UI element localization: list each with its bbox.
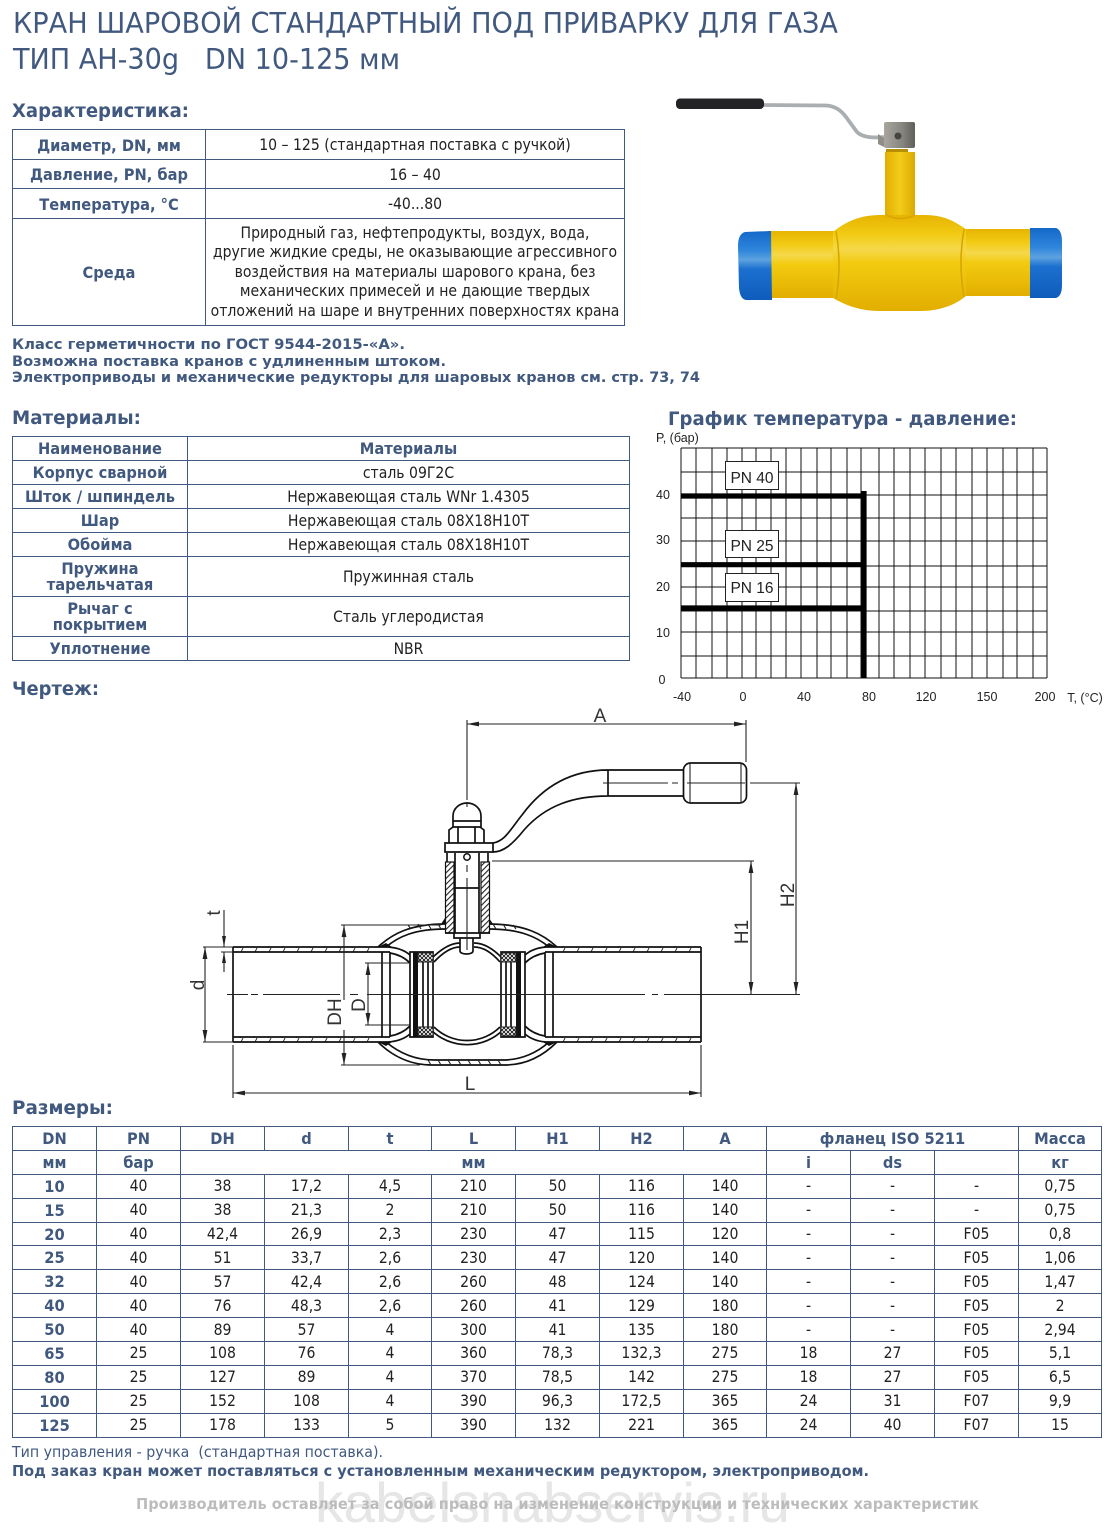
table: dimensions: 48,3 bbox=[291, 1297, 322, 1315]
table: dimensions: 40 bbox=[130, 1249, 147, 1267]
label: PN 25 bbox=[726, 530, 778, 558]
table: dimensions: 42,4 bbox=[291, 1273, 322, 1291]
table: dimensions: 4 bbox=[386, 1368, 394, 1386]
table: dimensions: 370 bbox=[460, 1368, 487, 1386]
table: dimensions: 27 bbox=[884, 1344, 901, 1362]
table: characteristics: Диаметр, DN, мм bbox=[37, 136, 181, 154]
table: materials: Обойма bbox=[68, 535, 132, 554]
table: dimensions: - bbox=[806, 1297, 811, 1315]
table: dimensions: - bbox=[806, 1225, 811, 1243]
table: dimensions: 0,75 bbox=[1044, 1201, 1076, 1219]
table: characteristics: механических примесей и не дающие твердых bbox=[240, 282, 590, 300]
table: dimensions: 41 bbox=[549, 1321, 566, 1339]
table: dimensions: 40 bbox=[44, 1296, 65, 1315]
notes bbox=[12, 337, 700, 386]
table: dimensions: 390 bbox=[460, 1392, 487, 1410]
dimension: t bbox=[204, 910, 233, 972]
table: dimensions: 17,2 bbox=[291, 1177, 322, 1195]
icon: left blue cap bbox=[738, 231, 772, 300]
label: PN 40 bbox=[726, 462, 778, 490]
table: dimensions: 2,3 bbox=[379, 1225, 401, 1243]
table: dimensions: 89 bbox=[298, 1368, 315, 1386]
x axis labels: -40 bbox=[673, 690, 691, 704]
table: dimensions: 133 bbox=[293, 1416, 320, 1434]
table: dimensions: 365 bbox=[712, 1392, 738, 1410]
table: dimensions: A bbox=[719, 1129, 731, 1148]
table: dimensions: 78,5 bbox=[542, 1368, 573, 1386]
table: materials: Наименование bbox=[38, 439, 162, 458]
table: dimensions: i bbox=[806, 1153, 811, 1172]
table: dimensions: мм bbox=[43, 1153, 66, 1172]
table: dimensions: - bbox=[890, 1249, 895, 1267]
table: dimensions: 132 bbox=[544, 1416, 571, 1434]
table: characteristics: 16 – 40 bbox=[389, 166, 441, 184]
label: PN 25: PN 25 bbox=[730, 538, 774, 555]
table: dimensions: - bbox=[806, 1201, 811, 1219]
table: dimensions: 40 bbox=[130, 1297, 147, 1315]
notes: Возможна поставка кранов с удлиненным штоком. bbox=[12, 354, 446, 370]
table: dimensions: 47 bbox=[549, 1225, 566, 1243]
table: dimensions: - bbox=[974, 1177, 979, 1195]
table: dimensions: 115 bbox=[628, 1225, 655, 1243]
heading: dimensions: Размеры: bbox=[12, 1097, 113, 1119]
table: dimensions: 57 bbox=[214, 1273, 231, 1291]
table: dimensions: 21,3 bbox=[291, 1201, 322, 1219]
table: dimensions: - bbox=[806, 1273, 811, 1291]
table: dimensions: 135 bbox=[628, 1321, 655, 1339]
table: dimensions: 178 bbox=[209, 1416, 236, 1434]
table: dimensions: ds bbox=[883, 1153, 902, 1172]
dimension: H1: H1 bbox=[732, 920, 753, 944]
table: dimensions: 230 bbox=[460, 1225, 487, 1243]
chart: temperature-pressure bbox=[656, 431, 1103, 705]
table: dimensions: 5,1 bbox=[1049, 1344, 1071, 1362]
table: dimensions: 24 bbox=[800, 1392, 817, 1410]
icon: yellow stem bbox=[885, 152, 915, 218]
table: dimensions: F05 bbox=[964, 1368, 989, 1386]
table: dimensions: F05 bbox=[964, 1249, 989, 1267]
table: dimensions: 9,9 bbox=[1049, 1392, 1071, 1410]
footer note: control type: Тип управления - ручка (стандартная поставка). bbox=[11, 1443, 383, 1461]
table: dimensions: 2,6 bbox=[379, 1249, 401, 1267]
table: materials: тарельчатая bbox=[47, 575, 153, 594]
table: dimensions: 127 bbox=[209, 1368, 236, 1386]
table: dimensions: 275 bbox=[712, 1344, 738, 1362]
notes: Электроприводы и механические редукторы для шаровых кранов см. стр. 73, 74 bbox=[12, 370, 700, 386]
y axis labels: 40 bbox=[656, 488, 670, 502]
table: dimensions: 100 bbox=[39, 1392, 70, 1411]
table: dimensions: 26,9 bbox=[291, 1225, 322, 1243]
table: dimensions: 142 bbox=[628, 1368, 655, 1386]
heading: materials: Материалы: bbox=[12, 407, 141, 429]
drawing: ball bbox=[431, 943, 503, 1045]
table: dimensions: кг bbox=[1051, 1153, 1069, 1172]
table: dimensions: 124 bbox=[628, 1273, 655, 1291]
title bbox=[12, 6, 838, 76]
table: materials: Корпус сварной bbox=[33, 463, 167, 482]
table: dimensions: 25 bbox=[130, 1392, 147, 1410]
table: dimensions: 260 bbox=[460, 1297, 487, 1315]
table: dimensions: 15 bbox=[44, 1201, 65, 1220]
technical drawing bbox=[188, 706, 800, 1098]
table: dimensions: PN bbox=[127, 1129, 150, 1148]
y axis labels: P, (бар) bbox=[656, 431, 699, 445]
table: dimensions: 260 bbox=[460, 1273, 487, 1291]
table: materials: сталь 09Г2С bbox=[363, 464, 454, 482]
y axis labels bbox=[656, 431, 699, 687]
table: dimensions bbox=[12, 1126, 1102, 1438]
table: dimensions: 210 bbox=[460, 1201, 487, 1219]
table: dimensions: 275 bbox=[712, 1368, 738, 1386]
table: dimensions: 2,6 bbox=[379, 1297, 401, 1315]
table: dimensions: 24 bbox=[800, 1416, 817, 1434]
table: dimensions: 18 bbox=[800, 1368, 817, 1386]
table: dimensions: 89 bbox=[214, 1321, 231, 1339]
table: dimensions: - bbox=[890, 1273, 895, 1291]
icon: ball body bbox=[833, 215, 966, 311]
table: dimensions: - bbox=[890, 1177, 895, 1195]
heading: characteristics: Характеристика: bbox=[12, 100, 189, 122]
table: dimensions: 40 bbox=[130, 1273, 147, 1291]
table: characteristics: -40...80 bbox=[388, 195, 442, 213]
table: dimensions: Масса bbox=[1034, 1129, 1086, 1148]
table: dimensions: DN bbox=[42, 1129, 67, 1148]
table: dimensions: 1,06 bbox=[1044, 1249, 1076, 1267]
table: dimensions: 42,4 bbox=[207, 1225, 238, 1243]
table: dimensions: 18 bbox=[800, 1344, 817, 1362]
table: materials: Материалы bbox=[360, 439, 457, 458]
table: dimensions: - bbox=[974, 1201, 979, 1219]
x axis labels: T, (°C) bbox=[1067, 691, 1103, 705]
dimension: D bbox=[349, 963, 410, 1025]
dimension: A: A bbox=[594, 706, 607, 727]
table: dimensions: 40 bbox=[130, 1177, 147, 1195]
table: dimensions: 57 bbox=[298, 1321, 315, 1339]
table: characteristics: Среда bbox=[83, 263, 135, 282]
drawing: centre lines bbox=[227, 720, 800, 994]
table: dimensions: F07 bbox=[964, 1392, 989, 1410]
table: dimensions: 76 bbox=[214, 1297, 231, 1315]
table: dimensions: 230 bbox=[460, 1249, 487, 1267]
grid bbox=[681, 448, 1047, 678]
table: dimensions: - bbox=[890, 1225, 895, 1243]
icon: lever handle bbox=[676, 98, 884, 137]
table: dimensions: 31 bbox=[884, 1392, 901, 1410]
table: materials: Нержавеющая сталь 08Х18Н10Т bbox=[288, 536, 529, 554]
table: dimensions: 152 bbox=[209, 1392, 236, 1410]
table: materials: Сталь углеродистая bbox=[333, 608, 484, 626]
table: dimensions: 33,7 bbox=[291, 1249, 322, 1267]
dimension: L: L bbox=[465, 1074, 475, 1095]
table: dimensions: 25 bbox=[130, 1368, 147, 1386]
table: dimensions: 221 bbox=[628, 1416, 655, 1434]
table: materials: Нержавеющая сталь 08Х18Н10Т bbox=[288, 512, 529, 530]
icon: left pipe bbox=[768, 231, 836, 298]
table: dimensions: F05 bbox=[964, 1344, 989, 1362]
table: dimensions: бар bbox=[123, 1153, 154, 1172]
table: dimensions: 210 bbox=[460, 1177, 487, 1195]
table: materials bbox=[12, 436, 630, 661]
table: characteristics: воздействия на материалы шарового крана, без bbox=[235, 263, 595, 281]
table: dimensions: 25 bbox=[130, 1344, 147, 1362]
table: dimensions: 0,75 bbox=[1044, 1177, 1076, 1195]
table: dimensions: - bbox=[806, 1177, 811, 1195]
icon: stem head bbox=[878, 122, 915, 156]
x axis labels: 200 bbox=[1035, 690, 1055, 704]
x axis labels: 40 bbox=[797, 690, 811, 704]
thick pressure limit lines bbox=[681, 491, 864, 678]
drawing: body shell bbox=[378, 918, 557, 1065]
table: materials: Рычаг с bbox=[67, 599, 133, 618]
table: dimensions: 10 bbox=[44, 1177, 65, 1196]
table: dimensions: 50 bbox=[549, 1201, 566, 1219]
table: dimensions: 2,94 bbox=[1044, 1321, 1076, 1339]
table: dimensions: 116 bbox=[628, 1201, 655, 1219]
table: dimensions: 40 bbox=[130, 1225, 147, 1243]
label: PN 40: PN 40 bbox=[730, 470, 774, 487]
table: dimensions: 108 bbox=[293, 1392, 320, 1410]
table: dimensions: 41 bbox=[549, 1297, 566, 1315]
heading: chart: График температура - давление: bbox=[668, 408, 1017, 430]
table: dimensions: 80 bbox=[44, 1368, 65, 1387]
manufacturer disclaimer: Производитель оставляет за собой право на изменение конструкции и технических характеристик bbox=[136, 1495, 979, 1513]
table: dimensions: 65 bbox=[44, 1344, 65, 1363]
table: dimensions: 300 bbox=[460, 1321, 487, 1339]
table: dimensions: 15 bbox=[1051, 1416, 1069, 1434]
table: materials: Шар bbox=[81, 511, 119, 530]
table: characteristics: Температура, °С bbox=[39, 194, 179, 214]
table: dimensions: 4 bbox=[386, 1392, 394, 1410]
heading: drawing: Чертеж: bbox=[12, 678, 99, 700]
dimension: H2: H2 bbox=[778, 883, 799, 907]
table: dimensions: 48 bbox=[549, 1273, 566, 1291]
table: dimensions: 78,3 bbox=[542, 1344, 573, 1362]
table: dimensions: H2 bbox=[630, 1129, 653, 1148]
table: dimensions: 51 bbox=[214, 1249, 231, 1267]
table: dimensions: - bbox=[890, 1297, 895, 1315]
x axis labels: 80 bbox=[862, 690, 876, 704]
table: dimensions: 120 bbox=[712, 1225, 738, 1243]
table: dimensions: 27 bbox=[884, 1368, 901, 1386]
dimension: DH: DH bbox=[325, 998, 346, 1026]
drawing: nut and dome bbox=[445, 803, 493, 852]
table: dimensions: фланец ISO 5211 bbox=[820, 1129, 965, 1148]
table: dimensions: 172,5 bbox=[621, 1392, 662, 1410]
x axis labels bbox=[673, 690, 1103, 705]
dimension: L bbox=[233, 1045, 701, 1098]
table: dimensions: 1,47 bbox=[1044, 1273, 1076, 1291]
table: dimensions: 32 bbox=[44, 1272, 65, 1291]
table: dimensions: F05 bbox=[964, 1273, 989, 1291]
table: dimensions: 50 bbox=[44, 1320, 65, 1339]
table: dimensions: 38 bbox=[214, 1201, 231, 1219]
table: dimensions: 4,5 bbox=[379, 1177, 401, 1195]
table: dimensions: 76 bbox=[298, 1344, 315, 1362]
table: dimensions: DH bbox=[210, 1129, 235, 1148]
table: dimensions: 140 bbox=[712, 1177, 738, 1195]
dimension: d: d bbox=[188, 980, 209, 990]
icon: right blue cap bbox=[1030, 228, 1062, 298]
table: dimensions: 6,5 bbox=[1049, 1368, 1071, 1386]
table: dimensions: 0,8 bbox=[1049, 1225, 1071, 1243]
y axis labels: 20 bbox=[656, 580, 670, 594]
table: dimensions: 5 bbox=[386, 1416, 394, 1434]
table: materials: Пружина bbox=[61, 559, 139, 578]
table: dimensions: 129 bbox=[628, 1297, 655, 1315]
dimension: d bbox=[188, 947, 233, 1042]
table: dimensions: 132,3 bbox=[621, 1344, 662, 1362]
drawing: neck and stem bbox=[445, 853, 490, 954]
table: dimensions: F05 bbox=[964, 1225, 989, 1243]
table: dimensions: 96,3 bbox=[542, 1392, 573, 1410]
y axis labels: 10 bbox=[656, 626, 670, 640]
table: dimensions: 390 bbox=[460, 1416, 487, 1434]
table: dimensions: 180 bbox=[712, 1321, 738, 1339]
label: PN 16: PN 16 bbox=[730, 580, 774, 597]
table: dimensions: 140 bbox=[712, 1201, 738, 1219]
table: dimensions: 180 bbox=[712, 1297, 738, 1315]
table: characteristics bbox=[12, 129, 625, 326]
table: materials: покрытием bbox=[53, 615, 147, 634]
x axis labels: 150 bbox=[977, 690, 997, 704]
table: dimensions: H1 bbox=[546, 1129, 569, 1148]
table: dimensions: 4 bbox=[386, 1344, 394, 1362]
table: dimensions: 140 bbox=[712, 1249, 738, 1267]
y axis labels: 30 bbox=[656, 533, 670, 547]
table: materials: Пружинная сталь bbox=[343, 568, 474, 586]
table: dimensions: 2 bbox=[386, 1201, 394, 1219]
table: dimensions: 2,6 bbox=[379, 1273, 401, 1291]
table: dimensions: 116 bbox=[628, 1177, 655, 1195]
table: dimensions: - bbox=[806, 1249, 811, 1267]
dimension: DH bbox=[325, 925, 441, 1065]
table: dimensions: d bbox=[301, 1129, 312, 1148]
table: dimensions: 38 bbox=[214, 1177, 231, 1195]
table: dimensions: - bbox=[806, 1321, 811, 1339]
label: PN 16 bbox=[726, 574, 778, 602]
drawing: pipes bbox=[233, 947, 701, 1042]
table: materials: Шток / шпиндель bbox=[25, 487, 175, 506]
table: characteristics: Давление, PN, бар bbox=[30, 165, 188, 184]
table: materials: Нержавеющая сталь WNr 1.4305 bbox=[287, 488, 530, 506]
table: characteristics: другие жидкие среды, не оказывающие агрессивного bbox=[213, 243, 617, 261]
table: dimensions: 365 bbox=[712, 1416, 738, 1434]
weld seams bbox=[836, 215, 964, 299]
drawing: lever handle bbox=[493, 763, 746, 852]
table: characteristics: 10 – 125 (стандартная поставка с ручкой) bbox=[259, 136, 571, 154]
table: dimensions: 125 bbox=[39, 1416, 70, 1435]
title: ТИП АН-30g DN 10-125 мм bbox=[12, 43, 400, 76]
table: dimensions: 40 bbox=[130, 1321, 147, 1339]
table: dimensions: L bbox=[469, 1129, 478, 1148]
table: dimensions: 40 bbox=[884, 1416, 901, 1434]
notes: Класс герметичности по ГОСТ 9544-2015-«А». bbox=[12, 337, 405, 353]
y axis labels: 0 bbox=[659, 673, 666, 687]
table: dimensions: 108 bbox=[209, 1344, 236, 1362]
drawing: sleeves bbox=[382, 947, 553, 1042]
table: dimensions: 120 bbox=[628, 1249, 655, 1267]
table: dimensions: 140 bbox=[712, 1273, 738, 1291]
x axis labels: 0 bbox=[740, 690, 747, 704]
icon: right pipe bbox=[963, 229, 1033, 296]
dimension: D: D bbox=[349, 998, 370, 1012]
table: dimensions: F05 bbox=[964, 1321, 989, 1339]
table: dimensions: 25 bbox=[130, 1416, 147, 1434]
table: dimensions: F07 bbox=[964, 1416, 989, 1434]
table: dimensions: - bbox=[890, 1321, 895, 1339]
table: characteristics: Природный газ, нефтепродукты, воздух, вода, bbox=[241, 224, 589, 242]
drawing: seats bbox=[410, 952, 525, 1037]
photo: yellow gas ball valve bbox=[676, 98, 1062, 311]
table: dimensions: F05 bbox=[964, 1297, 989, 1315]
table: dimensions: 20 bbox=[44, 1224, 65, 1244]
table: dimensions: - bbox=[890, 1201, 895, 1219]
table: dimensions: мм bbox=[462, 1153, 485, 1172]
table: dimensions: 47 bbox=[549, 1249, 566, 1267]
table: dimensions: 4 bbox=[386, 1321, 394, 1339]
title: КРАН ШАРОВОЙ СТАНДАРТНЫЙ ПОД ПРИВАРКУ ДЛЯ ГАЗА bbox=[13, 6, 838, 40]
table: dimensions: t bbox=[386, 1129, 394, 1148]
table: materials: Уплотнение bbox=[49, 639, 151, 658]
dimension: t: t bbox=[204, 910, 225, 916]
table: dimensions: 2 bbox=[1056, 1297, 1064, 1315]
x axis labels: 120 bbox=[916, 690, 936, 704]
table: dimensions: 50 bbox=[549, 1177, 566, 1195]
table: dimensions: 360 bbox=[460, 1344, 487, 1362]
table: dimensions: 25 bbox=[44, 1248, 65, 1267]
table: materials: NBR bbox=[394, 640, 423, 658]
table: dimensions: 40 bbox=[130, 1201, 147, 1219]
table: characteristics: отложений на шаре и внутренних поверхностях крана bbox=[211, 302, 619, 320]
footer note: on request: Под заказ кран может поставляться с установленным механическим редуктором, электроприводом. bbox=[12, 1462, 869, 1480]
